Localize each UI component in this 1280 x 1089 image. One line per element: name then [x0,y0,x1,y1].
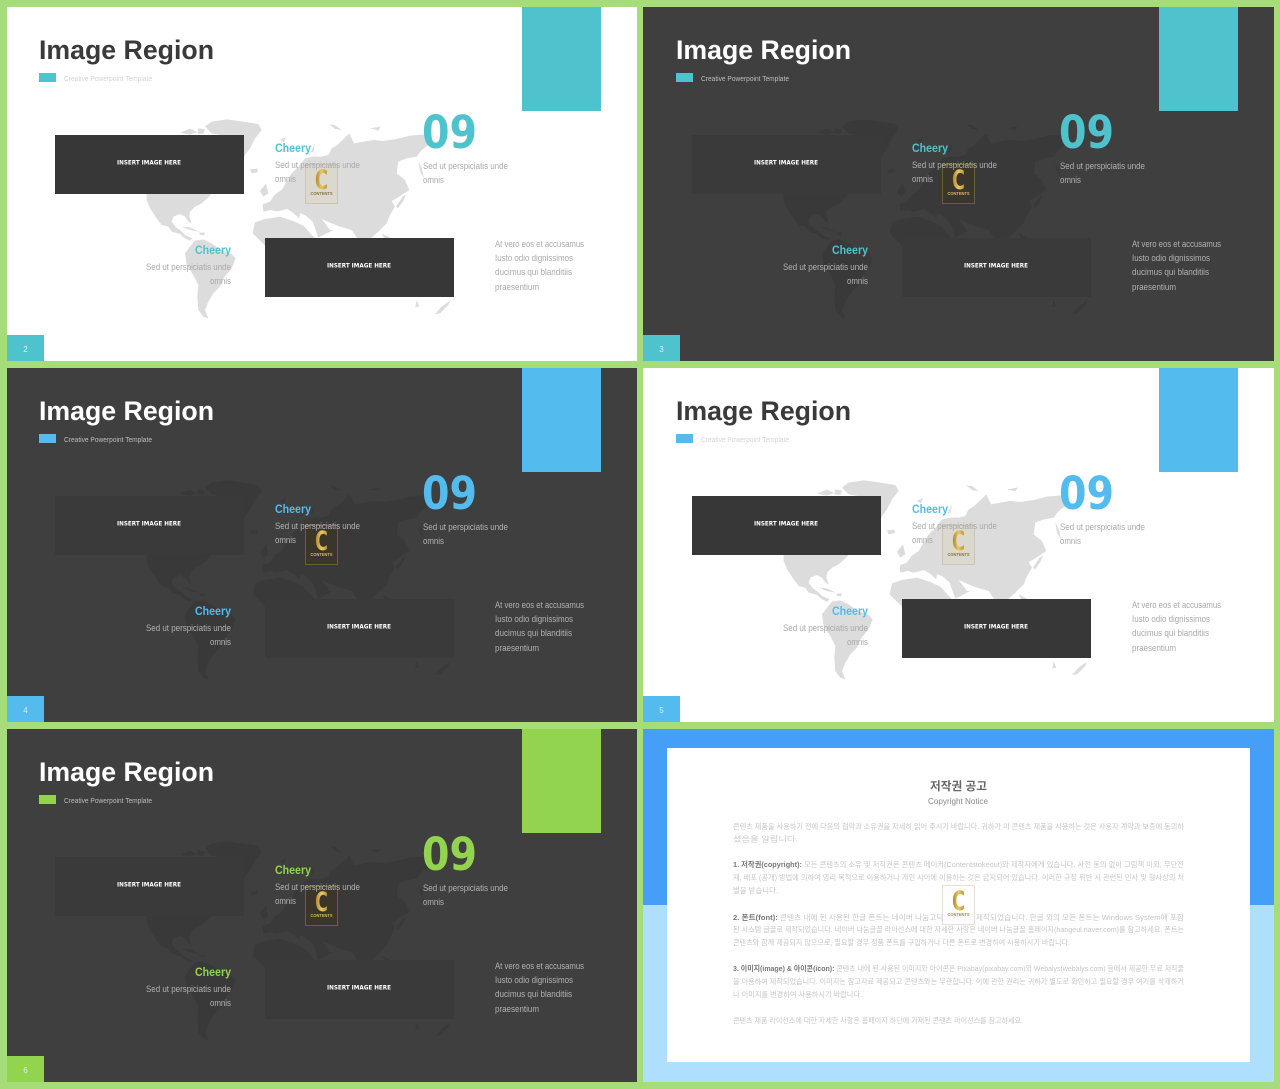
text block: paragraph: Iusto odio dignissimos [1132,252,1210,263]
text block: number caption [423,160,508,185]
text block: cheery top: omnis [912,173,933,184]
page number: 5 [659,706,664,715]
text block: number caption: Sed ut perspiciatis unde [1060,521,1145,532]
text block: number caption: omnis [1060,174,1081,185]
text block: cheery bottom: Cheery [832,606,869,618]
title: Image Region [39,35,214,65]
logo watermark [942,886,974,924]
world map [784,480,1087,679]
text block: cheery top: Sed ut perspiciatis unde [912,520,997,531]
big number: 09 [422,828,477,881]
text block: cheery bottom: omnis [847,636,868,647]
text block: number caption [1060,160,1145,185]
section 3: image and icon: 3. 이미지(image) & 아이콘(icon): 콘텐츠 내에 된 사용된 이미지와 아이콘은 Pixabay(pixabay.com)와 Webalys(webalys.com) 등에서 제공한 무료 저작물 [733,963,1184,973]
text block: cheery bottom: Sed ut perspiciatis unde [146,261,231,272]
image placeholder: INSERT IMAGE HERE [754,160,818,166]
page number: 6 [23,1066,28,1075]
panel: slide 2 white teal [7,7,637,361]
title: Image Region [676,396,851,426]
text block: cheery top: Cheery [275,865,312,877]
accent block [522,368,601,472]
subtitle: Creative Powerpoint Template [64,437,152,444]
logo watermark: C [952,526,965,557]
text block: number caption: omnis [423,535,444,546]
text block: cheery bottom: omnis [210,636,231,647]
text block: paragraph [495,238,584,292]
text block: number caption: Sed ut perspiciatis unde [1060,160,1145,171]
text block: cheery top [275,143,360,184]
logo watermark: CONTENTS [948,912,970,918]
text block: cheery bottom: Cheery [195,245,232,257]
text block: paragraph: praesentium [1132,281,1176,292]
accent block [522,7,601,111]
big number: 09 [422,106,477,159]
section 1: copyright: 1. 저작권(copyright): 모든 콘텐츠의 소유 및 저작권은 콘텐츠 메이커(Contentstokeout)와 제작자에게 있습니다. 사전 동의 없이 그림책 이외, 무단전 [733,859,1184,869]
text block: cheery top: Sed ut perspiciatis unde [275,159,360,170]
subtitle [676,73,789,83]
text block: cheery top: Cheery [275,504,312,516]
text block: paragraph: praesentium [1132,642,1176,653]
panel: slide 5 white blue [643,368,1274,722]
text block: cheery bottom [146,245,232,286]
intro paragraph: 콘텐츠 제품을 사용하기 전에 다음의 협약과 소유권을 자세히 읽어 주시기 바랍니다. 귀하가 이 콘텐츠 제품을 사용하는 것은 사용자 계약과 보증에 동의하 [733,821,1184,831]
logo watermark: C [952,165,965,196]
text block: cheery bottom [783,606,869,647]
image placeholder [55,135,244,194]
text block: paragraph: At vero eos et accusamus [495,960,584,971]
image placeholder [265,238,454,297]
world map [147,841,450,1040]
text block: paragraph: ducimus qui blanditiis [495,266,572,277]
section 2: font: 된 시스템 글꼴로 제작되었습니다. 네이버 나눔글꼴 라이선스에 대한 자세한 사항은 네이버 나눔글꼴 홈페이지(hangeul.naver.com)를 참고하세요. 폰트는 [733,924,1184,934]
text block: cheery top: omnis [275,534,296,545]
text block: paragraph: Iusto odio dignissimos [495,613,573,624]
copyright heading: 저작권 공고 [930,779,987,793]
text block: paragraph: ducimus qui blanditiis [495,627,572,638]
text block: paragraph: ducimus qui blanditiis [1132,266,1209,277]
text block: cheery top: Cheery [912,504,949,516]
subtitle [39,434,152,444]
text block: number caption [423,882,508,907]
page number: 4 [23,706,28,715]
section 1: copyright [733,859,1184,895]
logo watermark [942,164,974,204]
text block: number caption: Sed ut perspiciatis unde [423,521,508,532]
subtitle: Creative Powerpoint Template [701,76,789,83]
logo watermark: C [315,887,328,918]
page number [7,335,44,361]
text block: cheery bottom: Cheery [195,967,232,979]
title: Image Region [39,757,214,787]
section 3: image and icon: 을 이용하여 제작되었습니다. 이미지는 참고자료 제공되고 콘텐츠와는 무관합니다. 이에 관한 권리는 귀하가 별도로 확인하고 필요할 경우 여기를 삭제하거 [733,976,1184,986]
panel: copyright notice slide [643,729,1274,1082]
text block: cheery bottom [146,967,232,1008]
page number [7,1056,44,1082]
text block: cheery bottom: Cheery [832,245,869,257]
text block: paragraph: ducimus qui blanditiis [495,988,572,999]
page number: 2 [23,345,28,354]
text block: cheery top: Sed ut perspiciatis unde [912,159,997,170]
text block: cheery bottom: omnis [210,997,231,1008]
subtitle: Creative Powerpoint Template [64,798,152,805]
title: Image Region [39,396,214,426]
image placeholder: INSERT IMAGE HERE [117,160,181,166]
section 2: font: 2. 폰트(font): 콘텐츠 내에 된 사용된 한글 폰트는 네이버 나눔고딕의 서체로 제작되었습니다. 한글 외의 모든 폰트는 Windows System에 포함 [733,912,1184,922]
text block: cheery top: Cheery [912,143,949,155]
text block: paragraph: At vero eos et accusamus [495,599,584,610]
text block: paragraph [495,599,584,653]
text block: cheery top: Sed ut perspiciatis unde [275,520,360,531]
text block: paragraph: At vero eos et accusamus [495,238,584,249]
logo watermark: CONTENTS [310,913,333,919]
page number: 3 [659,345,664,354]
text block: paragraph: Iusto odio dignissimos [495,974,573,985]
text block: number caption [423,521,508,546]
text block: paragraph: Iusto odio dignissimos [495,252,573,263]
text block: paragraph [1132,599,1221,653]
text block: number caption: omnis [423,896,444,907]
text block: paragraph: At vero eos et accusamus [1132,599,1221,610]
text block: cheery bottom: Sed ut perspiciatis unde [783,261,868,272]
text block: cheery top: Sed ut perspiciatis unde [275,881,360,892]
subtitle [676,434,789,444]
logo watermark: CONTENTS [310,552,333,558]
image placeholder: INSERT IMAGE HERE [964,262,1028,270]
logo watermark [942,526,974,564]
big number: 09 [1059,106,1114,159]
accent block [1159,7,1238,111]
section 3: image and icon: 나 이미지를 변경하여 사용하시기 바랍니다. [733,989,862,999]
text block: paragraph: praesentium [495,281,539,292]
text block: cheery top [275,504,360,545]
white card [667,748,1250,1062]
image placeholder [902,238,1091,297]
text block: cheery bottom: Sed ut perspiciatis unde [146,983,231,994]
logo watermark: C [315,165,328,196]
image placeholder: INSERT IMAGE HERE [327,624,391,630]
image placeholder [55,857,244,916]
text block: cheery top: omnis [912,534,933,545]
page number [643,335,680,361]
image placeholder: INSERT IMAGE HERE [964,624,1028,630]
text block: cheery bottom: Cheery [195,606,232,618]
section 2: font: 콘텐츠와 함께 제공되지 않으므로, 필요할 경우 정품 폰트를 구입하거나 다른 폰트로 변경하여 사용하시기 바랍니다. [733,937,1070,947]
logo watermark [306,526,338,564]
text block: number caption: omnis [423,174,444,185]
text block: cheery top: Cheery [275,143,312,155]
text block: number caption: Sed ut perspiciatis unde [423,160,508,171]
text block: cheery bottom: Sed ut perspiciatis unde [783,622,868,633]
section 3: image and icon [733,963,1184,999]
text block: paragraph [495,960,584,1014]
subtitle [39,73,152,83]
logo watermark: C [952,886,965,917]
text block: paragraph [1132,238,1221,292]
text block: cheery top: omnis [275,895,296,906]
logo watermark: CONTENTS [948,552,970,558]
intro paragraph: 셨음을 알립니다. [733,834,798,844]
page number [7,696,44,722]
logo watermark: CONTENTS [948,191,970,197]
logo watermark [306,164,338,204]
text block: cheery bottom [146,606,232,647]
text block: cheery top [912,504,997,545]
title: Image Region [676,35,851,65]
text block: cheery bottom: Sed ut perspiciatis unde [146,622,231,633]
text block: number caption [1060,521,1145,546]
image placeholder [692,496,881,555]
image placeholder: INSERT IMAGE HERE [327,262,391,270]
world map [147,480,450,679]
accent block [1159,368,1238,472]
image placeholder: INSERT IMAGE HERE [117,882,181,888]
image placeholder: INSERT IMAGE HERE [754,520,818,528]
section 1: copyright: 벌을 받습니다. [733,885,778,895]
text block: cheery bottom [783,245,869,286]
text block: number caption: omnis [1060,535,1081,546]
logo watermark: C [315,526,328,557]
text block: cheery bottom: omnis [847,275,868,286]
image placeholder: INSERT IMAGE HERE [327,984,391,992]
text block: cheery top [912,143,997,184]
subtitle [39,795,152,805]
world map [784,119,1087,318]
panel: slide 4 dark blue [7,368,637,722]
image placeholder [692,135,881,194]
intro paragraph [733,821,1184,844]
text block: paragraph: At vero eos et accusamus [1132,238,1221,249]
panel: slide 3 dark teal [643,7,1274,361]
big number: 09 [422,467,477,520]
section 2: font [733,912,1184,947]
copyright subheading: Copyright Notice [928,796,988,806]
logo watermark: CONTENTS [310,191,333,197]
subtitle: Creative Powerpoint Template [701,437,789,444]
panel: slide 6 dark green [7,729,637,1082]
big number: 09 [1059,467,1114,520]
text block: paragraph: Iusto odio dignissimos [1132,613,1210,624]
image placeholder [265,599,454,658]
closing note: 콘텐츠 제품 라이선스에 대한 자세한 사항은 홈페이지 하단에 기재된 콘텐츠 라이선스를 참고하세요. [733,1015,1023,1025]
accent block [522,729,601,833]
text block: paragraph: ducimus qui blanditiis [1132,627,1209,638]
text block: paragraph: praesentium [495,1003,539,1014]
section 1: copyright: 재, 배포 (공개) 방법에 의하여 영리 목적으로 이용하거나 개인 사이에 이용하는 것은 금지되어 있습니다. 이러한 규정 위반 시 관련된 민사 및 형사상의 처 [733,872,1184,882]
text block: cheery top [275,865,360,906]
text block: cheery top: omnis [275,173,296,184]
logo watermark [306,886,338,926]
subtitle: Creative Powerpoint Template [64,76,152,83]
world map [147,119,450,318]
image placeholder [55,496,244,555]
image placeholder: INSERT IMAGE HERE [117,520,181,528]
page number [643,696,680,722]
image placeholder [265,960,454,1019]
image placeholder [902,599,1091,658]
text block: paragraph: praesentium [495,642,539,653]
text block: cheery bottom: omnis [210,275,231,286]
text block: number caption: Sed ut perspiciatis unde [423,882,508,893]
